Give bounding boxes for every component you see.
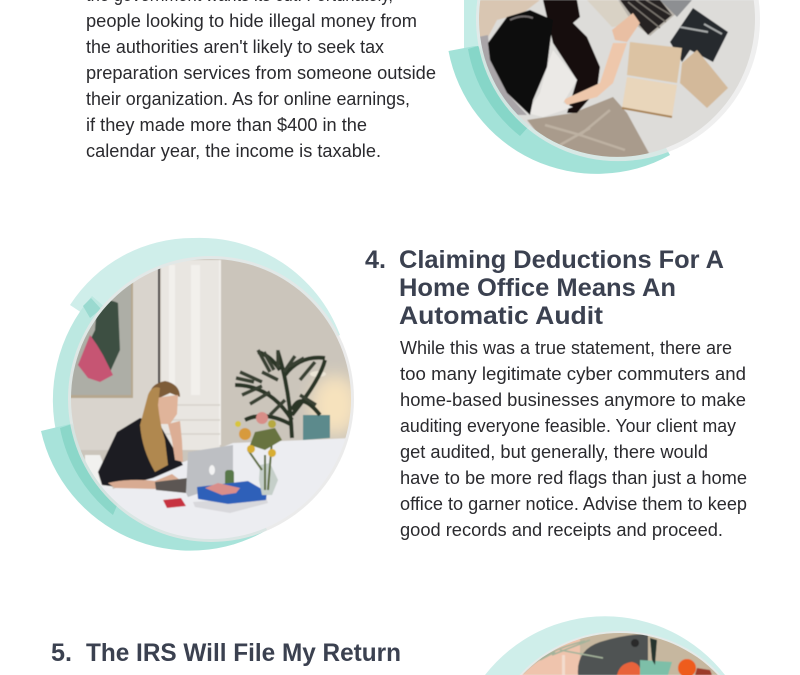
- vase and flowers: [259, 463, 278, 495]
- painting: [71, 282, 134, 398]
- photo panel: woman at table with laptop: [41, 238, 360, 551]
- arm and hand: [563, 43, 627, 105]
- heading: myth 5: 5.: [51, 639, 72, 667]
- hair: [488, 10, 553, 115]
- laptop: [155, 478, 188, 493]
- photo: [71, 259, 351, 539]
- laptop: [618, 0, 675, 36]
- teal circle: [485, 616, 725, 675]
- teal crescent: top: [70, 238, 340, 399]
- plant: [235, 352, 325, 438]
- photo: [520, 630, 720, 675]
- text block: myth 4 body: While this was a true statement, there are: [400, 338, 732, 358]
- peach floor corner: [479, 0, 540, 37]
- photo: [479, 0, 755, 157]
- text block: myth 4 body: good records and receipts and proceed.: [400, 520, 723, 540]
- heading: myth 4: Home Office Means An: [399, 274, 676, 302]
- teal ring: upper left: [464, 0, 520, 60]
- teal ring: left: [53, 296, 211, 440]
- rug: [527, 96, 650, 157]
- teal arc: lower left sweep: [41, 399, 267, 551]
- trousers: [543, 0, 600, 113]
- text block: myth 4 body: auditing everyone feasible. Your client may: [400, 416, 736, 436]
- text block: myth 4 body: [400, 338, 747, 540]
- person: [98, 418, 183, 487]
- text block: myth 4 body: too many legitimate cyber commuters and: [400, 364, 746, 384]
- heading: myth 5: The IRS Will File My Return: [86, 639, 401, 667]
- text block: myth 3 body: preparation services from someone outside: [86, 63, 436, 83]
- photo panel: woman working on floor with laptop and books: [448, 0, 770, 174]
- lamp glow: [311, 375, 359, 435]
- dark notebook: [670, 8, 728, 62]
- text block: myth 3 body: if they made more than $400 in the: [86, 115, 367, 135]
- pale ring: [476, 0, 760, 161]
- door: [158, 265, 160, 405]
- white shirt: [527, 50, 577, 117]
- heading: myth 4: Claiming Deductions For A: [399, 246, 724, 274]
- text block: myth 3 body: people looking to hide illegal money from: [86, 11, 417, 31]
- books: [194, 499, 268, 513]
- text block: myth 4 body: have to be more red flags than just a home: [400, 468, 747, 488]
- pale ring: [519, 631, 721, 675]
- text block: myth 4 body: home-based businesses anymore to make: [400, 390, 746, 410]
- text block: myth 4 body: office to garner notice. Advise them to keep: [400, 494, 747, 514]
- pot: [303, 415, 330, 440]
- heading: myth 4: Automatic Audit: [399, 302, 604, 330]
- beige box: [680, 50, 728, 108]
- text block: myth 3 body: [86, 0, 436, 161]
- heading: myth 4: 4.: [365, 246, 386, 274]
- teal arc: lower left sweep: [448, 46, 670, 174]
- photo panel: colourful illustration, cropped at bottom: [485, 616, 725, 675]
- teal patch: top left overlap: [83, 298, 101, 318]
- text block: myth 3 body: the authorities aren't likely to seek tax: [86, 37, 384, 57]
- teal arc: darker overlap: [60, 424, 118, 515]
- pale ring: [68, 256, 354, 542]
- table: [100, 438, 346, 539]
- text block: myth 4 body: get audited, but generally, there would: [400, 442, 708, 462]
- open book: [627, 42, 682, 83]
- white desk: [588, 0, 628, 27]
- text block: myth 3 body: their organization. As for online earnings,: [86, 89, 410, 109]
- heading: myth 4: [365, 246, 724, 330]
- text block: myth 3 body: calendar year, the income is taxable.: [86, 141, 381, 161]
- teal arc: darker overlap: [468, 46, 530, 136]
